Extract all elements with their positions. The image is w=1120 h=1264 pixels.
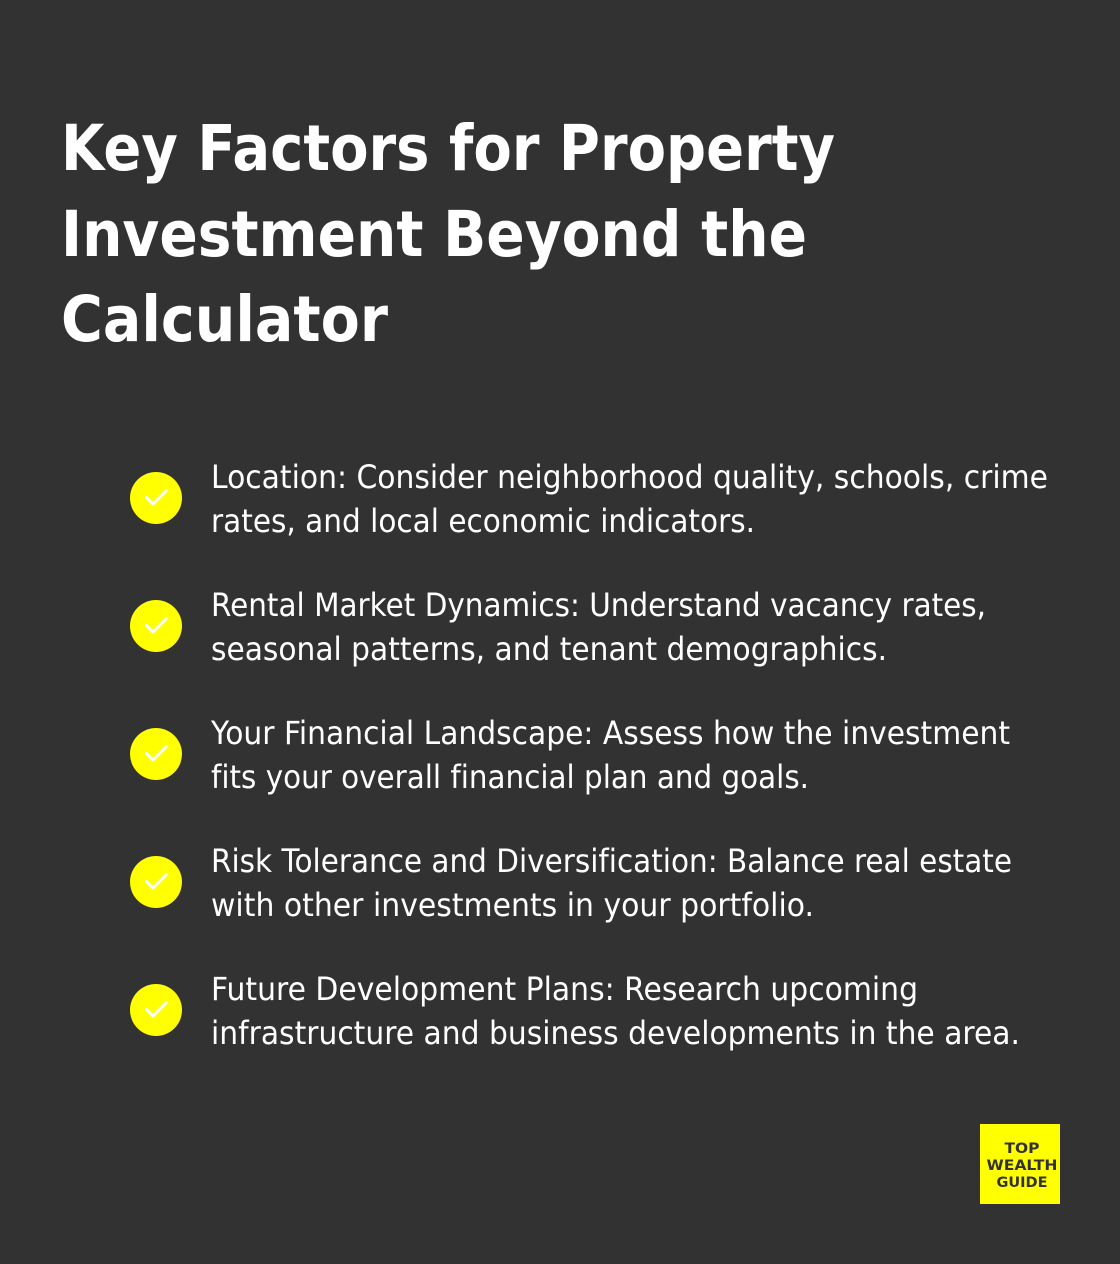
text: rental market xyxy=(211,586,986,668)
list item: location xyxy=(130,458,1048,540)
text: risk tolerance: with other investments in your portfolio. xyxy=(211,886,814,924)
logo: Top Wealth Guide: GUIDE xyxy=(996,1175,1048,1191)
icon: check badge xyxy=(130,600,182,652)
text: rental market: seasonal patterns, and tenant demographics. xyxy=(211,630,887,668)
icon: check badge xyxy=(130,984,182,1036)
title xyxy=(61,112,835,356)
icon: check badge xyxy=(130,472,182,524)
text: financial landscape xyxy=(210,714,1010,796)
icon: check badge xyxy=(130,728,182,780)
logo: Top Wealth Guide: TOP xyxy=(1004,1141,1040,1157)
text: rental market: Rental Market Dynamics: Understand vacancy rates, xyxy=(211,586,986,624)
text: future development xyxy=(211,970,1020,1052)
text: location: rates, and local economic indicators. xyxy=(211,502,755,540)
list item: risk tolerance xyxy=(130,842,1012,924)
text: financial landscape: fits your overall financial plan and goals. xyxy=(211,758,809,796)
text: financial landscape: Your Financial Landscape: Assess how the investment xyxy=(210,714,1010,752)
text: location: Location: Consider neighborhood quality, schools, crime xyxy=(211,458,1048,496)
text: future development: infrastructure and business developments in the area. xyxy=(211,1014,1020,1052)
title: Key Factors for Property xyxy=(61,112,835,185)
list item: future development xyxy=(130,970,1020,1052)
logo: Top Wealth Guide xyxy=(980,1124,1060,1204)
list item: financial landscape xyxy=(130,714,1010,796)
text: risk tolerance: Risk Tolerance and Diversification: Balance real estate xyxy=(211,842,1012,880)
title: Investment Beyond the xyxy=(61,198,807,271)
text: location xyxy=(211,458,1048,540)
logo: Top Wealth Guide: WEALTH xyxy=(986,1158,1058,1174)
text: future development: Future Development Plans: Research upcoming xyxy=(211,970,918,1008)
title: Calculator xyxy=(61,283,388,356)
text: risk tolerance xyxy=(211,842,1012,924)
list item: rental market xyxy=(130,586,986,668)
icon: check badge xyxy=(130,856,182,908)
